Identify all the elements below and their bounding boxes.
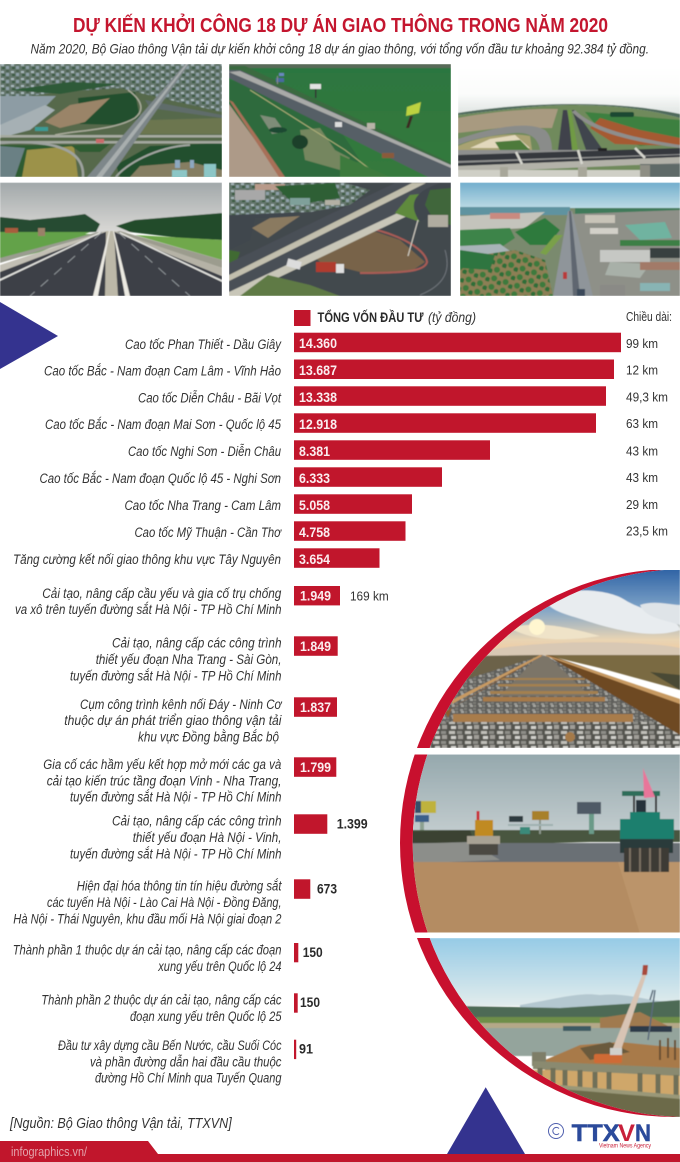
photo: highway through rice fields [229, 64, 451, 177]
row: Nha Trang - Cam Lâm [124, 494, 658, 514]
row: Mai Sơn - Quốc lộ 45: 63 km [626, 416, 658, 431]
row: Phan Thiết - Dầu Giây [125, 333, 658, 352]
row: Tây Nguyên [13, 548, 380, 568]
row: cầu Bến Nước, Suối Cóc: đường Hồ Chí Minh qua Tuyến Quang [95, 1070, 282, 1086]
photo: interchange with elevated road [458, 97, 680, 177]
row: Mỹ Thuận - Cần Thơ [134, 521, 668, 541]
photo: overpass and roundabout [229, 182, 451, 296]
row: đoạn Nha Trang - Sài Gòn: Cải tạo, nâng cấp các công trình [112, 636, 282, 650]
row: hầm yếu đoạn Vinh - Nha Trang: tuyến đường sắt Hà Nội - TP Hồ Chí Minh [70, 790, 282, 804]
row: cầu Bến Nước, Suối Cóc: và phần đường dẫn hai đầu cầu thuộc [90, 1054, 282, 1070]
row: Diễn Châu - Bãi Vọt: 13.338 [299, 390, 337, 405]
footer band [0, 1141, 680, 1162]
row: Mai Sơn - Quốc lộ 45 [45, 413, 658, 433]
row: cầu Bến Nước, Suối Cóc: 91 [299, 1041, 313, 1056]
row: cầu Bến Nước, Suối Cóc [58, 1038, 313, 1086]
red crescent: railway segment [417, 570, 662, 748]
row: Quốc lộ 45 - Nghi Sơn: 6.333 [299, 471, 330, 486]
logo: TTXVN [548, 1120, 651, 1150]
photo: highway interchange in a city [0, 64, 222, 178]
row: Diễn Châu - Bãi Vọt: 49,3 km [626, 389, 668, 404]
row: Quốc lộ 24: xung yếu trên Quốc lộ 24 [157, 959, 282, 974]
row: Nghi Sơn - Diễn Châu: 43 km [626, 443, 658, 458]
copyright mark [548, 1124, 564, 1138]
title: DỰ KIẾN KHỞI CÔNG 18 DỰ ÁN GIAO THÔNG TRONG NĂM 2020 [73, 13, 608, 37]
row: cầu yếu và trụ chống va xô: 169 km [350, 588, 389, 604]
photo: road construction with rollers [400, 754, 680, 934]
row: Quốc lộ 25 [41, 992, 320, 1024]
photo: road through town [460, 182, 680, 296]
row: Quốc lộ 25: Thành phần 2 thuộc dự án cải tạo, nâng cấp các [41, 992, 282, 1008]
row: cầu yếu và trụ chống va xô [15, 586, 389, 617]
photo: railway at sunset [430, 570, 680, 748]
row: đoạn Nha Trang - Sài Gòn: 1.849 [300, 639, 331, 654]
row: Quốc lộ 24 [13, 942, 323, 974]
row: Quốc lộ 25: đoạn xung yếu trên Quốc lộ 25 [130, 1009, 282, 1024]
row: Cam Lâm - Vĩnh Hảo: Cao tốc Bắc - Nam đoạn Cam Lâm - Vĩnh Hảo [44, 363, 281, 378]
row: Mỹ Thuận - Cần Thơ: Cao tốc Mỹ Thuận - Cần Thơ [134, 525, 283, 540]
row: đoạn Nha Trang - Sài Gòn: tuyến đường sắt Hà Nội - TP Hồ Chí Minh [70, 668, 282, 684]
row: Mỹ Thuận - Cần Thơ: 23,5 km [626, 524, 668, 539]
row: Mỹ Thuận - Cần Thơ: 4.758 [299, 525, 330, 540]
legend text: TỔNG VỐN ĐẦU TƯ [318, 310, 424, 325]
row: kênh nối Đáy - Ninh Cơ [64, 697, 337, 744]
row: thông tin tín hiệu đường sắt: Hà Nội - Thái Nguyên, khu đầu mối Hà Nội giai đoạn 2 [13, 912, 282, 926]
row: đoạn Hà Nội - Vinh [70, 814, 368, 862]
row: đoạn Hà Nội - Vinh: tuyến đường sắt Hà Nội - TP Hồ Chí Minh [70, 846, 282, 862]
row: kênh nối Đáy - Ninh Cơ: Cụm công trình kênh nối Đáy - Ninh Cơ [80, 697, 283, 712]
row: thông tin tín hiệu đường sắt: 673 [317, 881, 337, 896]
photo: bridge construction on river [430, 938, 680, 1117]
agency wordmark: Vietnam News Agency [599, 1144, 651, 1150]
red crescent: bridge segment [417, 938, 680, 1117]
decorative arrow: blue triangle, left [0, 302, 58, 369]
row: đoạn Nha Trang - Sài Gòn [70, 636, 338, 684]
row: đoạn Nha Trang - Sài Gòn: thiết yếu đoạn Nha Trang - Sài Gòn, [96, 652, 282, 667]
row: cầu yếu và trụ chống va xô: Cải tạo, nâng cấp cầu yếu và gia cố trụ chống [42, 586, 282, 601]
row: kênh nối Đáy - Ninh Cơ: khu vực Đồng bằng Bắc bộ [138, 730, 279, 744]
legend swatch [294, 310, 310, 326]
row: thông tin tín hiệu đường sắt [13, 878, 337, 926]
row: Cam Lâm - Vĩnh Hảo: 13.687 [299, 363, 337, 378]
row: hầm yếu đoạn Vinh - Nha Trang: 1.799 [300, 760, 331, 775]
agency wordmark: TTX [572, 1120, 620, 1147]
row: kênh nối Đáy - Ninh Cơ: thuộc dự án phát triển giao thông vận tải [64, 713, 282, 728]
row: Phan Thiết - Dầu Giây: 99 km [626, 336, 658, 351]
decorative arrow: blue triangle, bottom [447, 1087, 525, 1154]
row: hầm yếu đoạn Vinh - Nha Trang [43, 757, 336, 804]
footer site name: infographics.vn/ [11, 1144, 87, 1159]
row: Quốc lộ 25: 150 [300, 995, 320, 1010]
row: thông tin tín hiệu đường sắt: các tuyến Hà Nội - Lào Cai Hà Nội - Đồng Đăng, [47, 895, 282, 910]
row: Nha Trang - Cam Lâm: 5.058 [299, 498, 330, 513]
agency wordmark: V [618, 1120, 635, 1147]
row: Mai Sơn - Quốc lộ 45: Cao tốc Bắc - Nam đoạn Mai Sơn - Quốc lộ 45 [45, 417, 281, 432]
row: đoạn Hà Nội - Vinh: 1.399 [337, 816, 368, 831]
row: Quốc lộ 45 - Nghi Sơn: 43 km [626, 470, 658, 485]
row: Phan Thiết - Dầu Giây: 14.360 [299, 336, 337, 351]
row: đoạn Hà Nội - Vinh: thiết yếu đoạn Hà Nội - Vinh, [133, 830, 282, 845]
row: Tây Nguyên: 3.654 [299, 552, 330, 567]
legend unit: (tỷ đồng) [428, 310, 476, 325]
photo: empty expressway [0, 182, 222, 296]
row: Cam Lâm - Vĩnh Hảo [44, 360, 658, 379]
row: hầm yếu đoạn Vinh - Nha Trang: cải tạo kiến trúc tầng đoạn Vinh - Nha Trang, [47, 774, 282, 788]
red crescent: construction segment [400, 754, 428, 932]
row: Mai Sơn - Quốc lộ 45: 12.918 [299, 417, 337, 432]
row: cầu Bến Nước, Suối Cóc: Đầu tư xây dựng cầu Bến Nước, cầu Suối Cóc [58, 1038, 282, 1053]
row: kênh nối Đáy - Ninh Cơ: 1.837 [300, 700, 331, 715]
row: Diễn Châu - Bãi Vọt [138, 386, 668, 406]
row: đoạn Hà Nội - Vinh: Cải tạo, nâng cấp các công trình [112, 814, 282, 828]
row: Nha Trang - Cam Lâm: 29 km [626, 497, 658, 512]
row: Quốc lộ 45 - Nghi Sơn: Cao tốc Bắc - Nam đoạn Quốc lộ 45 - Nghi Sơn [40, 471, 281, 486]
row: Quốc lộ 45 - Nghi Sơn [40, 467, 658, 487]
row: Quốc lộ 24: 150 [303, 945, 323, 960]
row: cầu yếu và trụ chống va xô: 1.949 [300, 589, 331, 604]
row: Tây Nguyên: Tăng cường kết nối giao thông khu vực Tây Nguyên [13, 552, 281, 567]
source note: [Nguồn: Bộ Giao thông Vận tải, TTXVN] [9, 1115, 232, 1132]
row: hầm yếu đoạn Vinh - Nha Trang: Gia cố các hầm yếu kết hợp mở mới các ga và [43, 757, 282, 772]
row: Nghi Sơn - Diễn Châu [128, 440, 658, 460]
row: cầu yếu và trụ chống va xô: va xô trên tuyến đường sắt Hà Nội - TP Hồ Chí Minh [15, 602, 282, 617]
row: Nha Trang - Cam Lâm: Cao tốc Nha Trang - Cam Lâm [124, 498, 281, 513]
agency wordmark: N [635, 1120, 651, 1147]
row: Phan Thiết - Dầu Giây: Cao tốc Phan Thiết - Dầu Giây [125, 337, 282, 352]
legend: total investment [294, 310, 476, 326]
agency wordmark [572, 1120, 651, 1150]
row: Nghi Sơn - Diễn Châu: 8.381 [299, 444, 330, 459]
row: Cam Lâm - Vĩnh Hảo: 12 km [626, 363, 658, 378]
row: thông tin tín hiệu đường sắt: Hiện đại hóa thông tin tín hiệu đường sắt [77, 878, 283, 894]
row: Diễn Châu - Bãi Vọt: Cao tốc Diễn Châu - Bãi Vọt [138, 390, 282, 405]
row: Quốc lộ 24: Thành phần 1 thuộc dự án cải tạo, nâng cấp các đoạn [13, 942, 281, 958]
row: Nghi Sơn - Diễn Châu: Cao tốc Nghi Sơn - Diễn Châu [128, 444, 281, 459]
